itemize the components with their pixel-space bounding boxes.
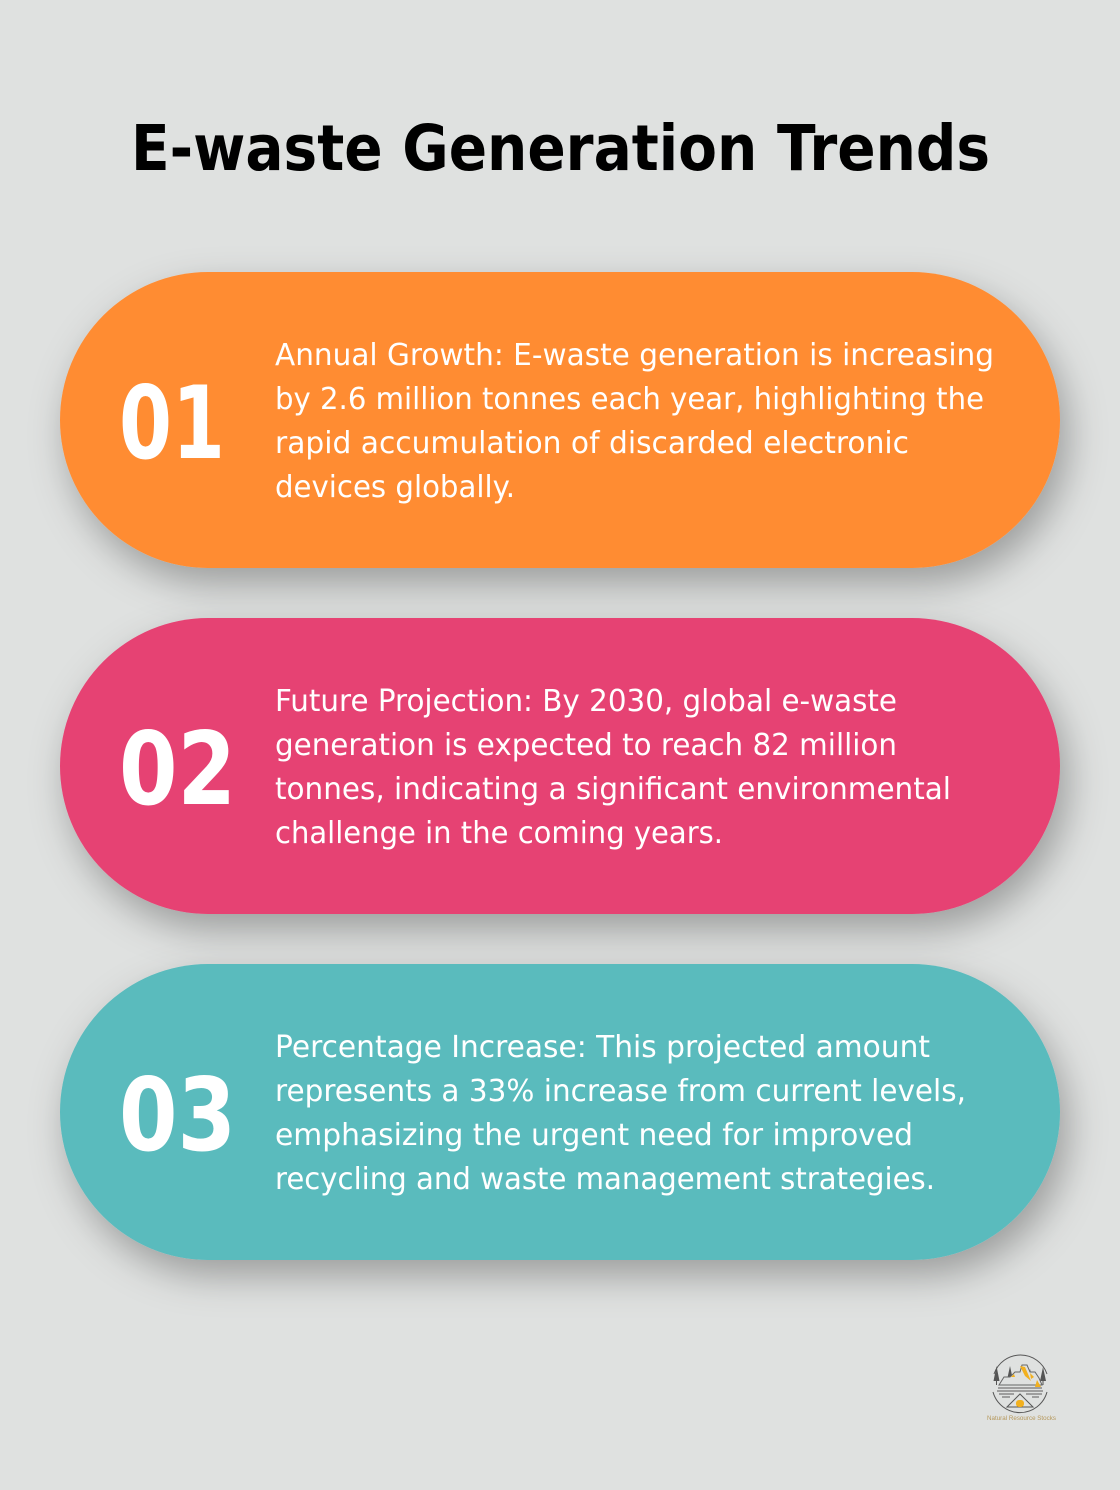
text: percentage increase: Percentage Increase: This projected amount bbox=[275, 1030, 930, 1065]
text: percentage increase: represents a 33% increase from current levels, bbox=[275, 1074, 966, 1109]
text: annual growth: Annual Growth: E-waste generation is increasing bbox=[275, 338, 994, 373]
text: future projection: generation is expected to reach 82 million bbox=[275, 728, 897, 763]
logo: Natural Resource Stocks bbox=[987, 1355, 1056, 1422]
text: percentage increase: recycling and waste management strategies. bbox=[275, 1162, 935, 1197]
title: E-waste Generation Trends bbox=[131, 112, 990, 185]
panel: future projection bbox=[60, 618, 1060, 914]
number 01: 01 bbox=[119, 364, 225, 482]
text: future projection: tonnes, indicating a significant environmental bbox=[275, 772, 951, 807]
text: percentage increase: emphasizing the urgent need for improved bbox=[275, 1118, 913, 1153]
text: future projection: challenge in the coming years. bbox=[275, 816, 723, 851]
text: annual growth bbox=[275, 338, 994, 505]
panel: annual growth bbox=[60, 272, 1060, 568]
text: percentage increase bbox=[275, 1030, 966, 1197]
text: annual growth: rapid accumulation of discarded electronic bbox=[275, 426, 909, 461]
panel: percentage increase bbox=[60, 964, 1060, 1260]
text: annual growth: devices globally. bbox=[275, 470, 515, 505]
text: annual growth: by 2.6 million tonnes each year, highlighting the bbox=[275, 382, 984, 417]
number 02: 02 bbox=[119, 710, 236, 828]
text: future projection: Future Projection: By 2030, global e-waste bbox=[275, 684, 897, 719]
logo: Natural Resource Stocks: Natural Resource Stocks bbox=[987, 1416, 1056, 1422]
number 03: 03 bbox=[119, 1056, 236, 1174]
text: future projection bbox=[275, 684, 951, 851]
